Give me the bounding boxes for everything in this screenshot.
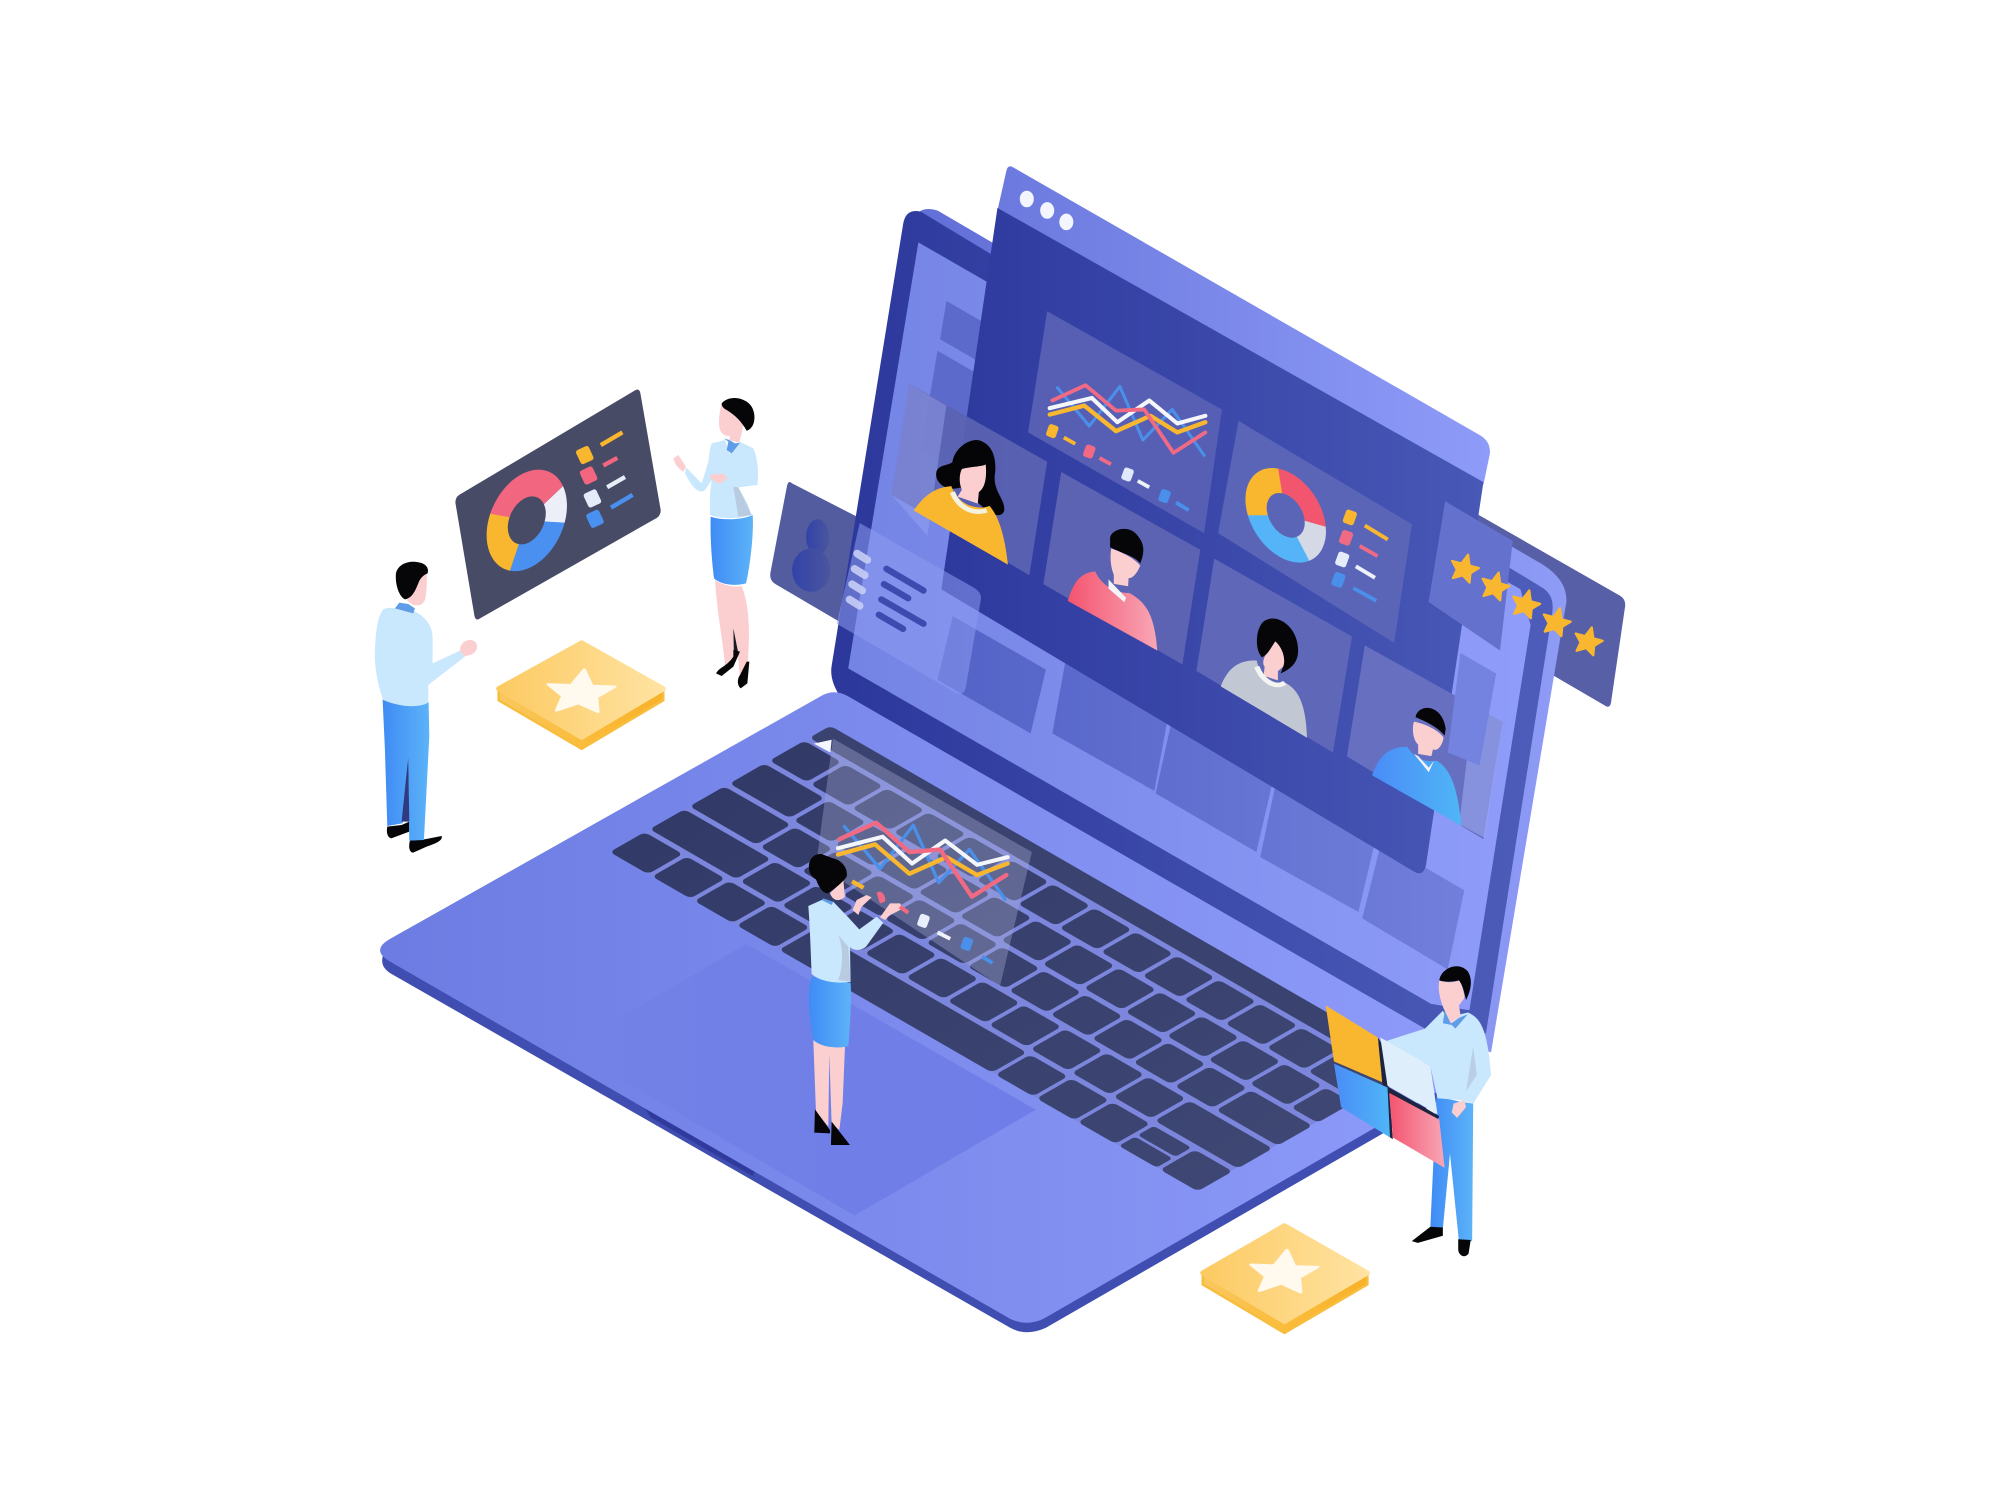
face — [407, 574, 427, 605]
keyboard — [610, 726, 1418, 1191]
face — [719, 403, 743, 443]
yellow panel — [1326, 1005, 1382, 1082]
left dashboard board with donut chart — [455, 389, 661, 619]
board legend — [575, 432, 633, 529]
translucent panel — [837, 523, 981, 694]
user icon silhouettes — [792, 519, 830, 592]
tile top — [1203, 1226, 1367, 1321]
person: yellow woman — [914, 440, 1008, 565]
hair — [1439, 966, 1471, 1000]
deck surface — [380, 692, 1486, 1323]
tile top — [499, 643, 663, 737]
star tile right — [1203, 1226, 1367, 1333]
rating stars — [1448, 551, 1605, 657]
skirt — [809, 977, 851, 1047]
person: grey shirt woman — [1221, 618, 1307, 738]
user card: yellow woman — [892, 384, 1047, 575]
person: blue shirt man — [1372, 708, 1462, 826]
person: man left — [375, 562, 477, 853]
hand — [460, 640, 477, 656]
trousers — [383, 699, 429, 841]
hair — [809, 854, 847, 893]
chart legend in window — [1045, 423, 1189, 510]
translucent strip right of blue man — [1459, 705, 1503, 838]
hologram glass — [816, 739, 1032, 986]
person: woman top — [673, 398, 758, 688]
tile star — [544, 668, 618, 712]
panel dark gaps — [1378, 1038, 1439, 1139]
laptop lid — [831, 209, 1566, 1052]
collar — [395, 603, 415, 613]
line chart in window — [1050, 385, 1205, 455]
donut card — [1218, 421, 1412, 643]
skirt slit — [733, 628, 738, 660]
legs — [813, 1040, 845, 1130]
base edge — [382, 941, 1486, 1332]
board — [455, 389, 661, 619]
shirt shadow — [1466, 1046, 1477, 1091]
floating dashboard window — [892, 166, 1513, 873]
shirt shadow — [733, 487, 752, 517]
hand — [1452, 1100, 1466, 1118]
lower screen cells — [938, 616, 1464, 969]
donut chart in window — [1238, 448, 1334, 582]
keys — [610, 741, 1392, 1191]
lid dark frame — [831, 211, 1553, 1048]
donut legend in window — [1331, 509, 1388, 601]
shirt shadow — [838, 935, 851, 982]
window title bar — [997, 166, 1490, 485]
trouser inner shadow — [402, 757, 409, 822]
hologram line chart — [838, 823, 1008, 899]
upper left screen cells — [921, 301, 989, 472]
shoes — [387, 822, 442, 853]
tile side — [1203, 1273, 1367, 1333]
shirt and arm — [1380, 1011, 1491, 1104]
donut — [479, 450, 575, 591]
neck — [830, 880, 845, 900]
user card: blue man — [1347, 645, 1503, 839]
shirt and arm — [808, 900, 883, 983]
touched marker — [877, 892, 885, 903]
star tile left — [499, 643, 663, 749]
base edge notch — [644, 1107, 755, 1176]
hologram legend — [852, 881, 992, 963]
user card: red person — [1043, 472, 1200, 665]
marker dash — [900, 907, 908, 913]
left floating panel overlay on lid — [792, 519, 981, 694]
trackpad — [568, 944, 1036, 1216]
person: man right with colour panels — [1326, 966, 1491, 1256]
user card: grey woman — [1196, 559, 1352, 753]
keyboard back strip — [809, 726, 1418, 1077]
lid inner screen — [848, 242, 1531, 1010]
collar — [822, 898, 833, 905]
face — [1439, 980, 1464, 1023]
shirt — [685, 440, 758, 518]
lid outer lip — [913, 209, 1566, 1052]
right lower translucent cell — [1448, 653, 1496, 765]
tile star — [1247, 1249, 1320, 1293]
laptop base — [380, 692, 1486, 1332]
chart card — [1028, 311, 1222, 533]
skirt — [711, 515, 753, 585]
person: red shirt — [1068, 529, 1157, 651]
window body — [941, 208, 1483, 873]
small white glint — [814, 740, 832, 753]
heels — [814, 1109, 850, 1145]
hair — [396, 562, 428, 599]
hand left — [673, 455, 686, 472]
collar — [724, 438, 740, 453]
list pills — [849, 554, 867, 606]
right floating panel behind lid — [1467, 514, 1625, 707]
trousers — [1430, 1096, 1473, 1241]
hands — [853, 895, 903, 920]
left floating panel behind lid — [770, 482, 944, 653]
legs — [715, 580, 749, 680]
person: woman center — [808, 854, 908, 1145]
shoes — [1412, 1227, 1471, 1256]
hand centre — [709, 473, 727, 484]
pink panel — [1389, 1093, 1445, 1168]
window dots — [1020, 191, 1073, 230]
shirt and arm — [375, 608, 465, 706]
heels — [716, 650, 749, 688]
keyboard gap background — [611, 738, 1397, 1190]
translucent strip over woman card — [892, 384, 946, 536]
collar — [1443, 1011, 1468, 1029]
blue panel — [1334, 1064, 1390, 1138]
list text bars — [879, 569, 923, 629]
tile side — [499, 689, 663, 749]
right translucent cell — [1429, 501, 1513, 651]
white panel — [1380, 1038, 1438, 1114]
hair — [722, 398, 754, 431]
hologram chart panel over keyboard — [814, 739, 1032, 986]
